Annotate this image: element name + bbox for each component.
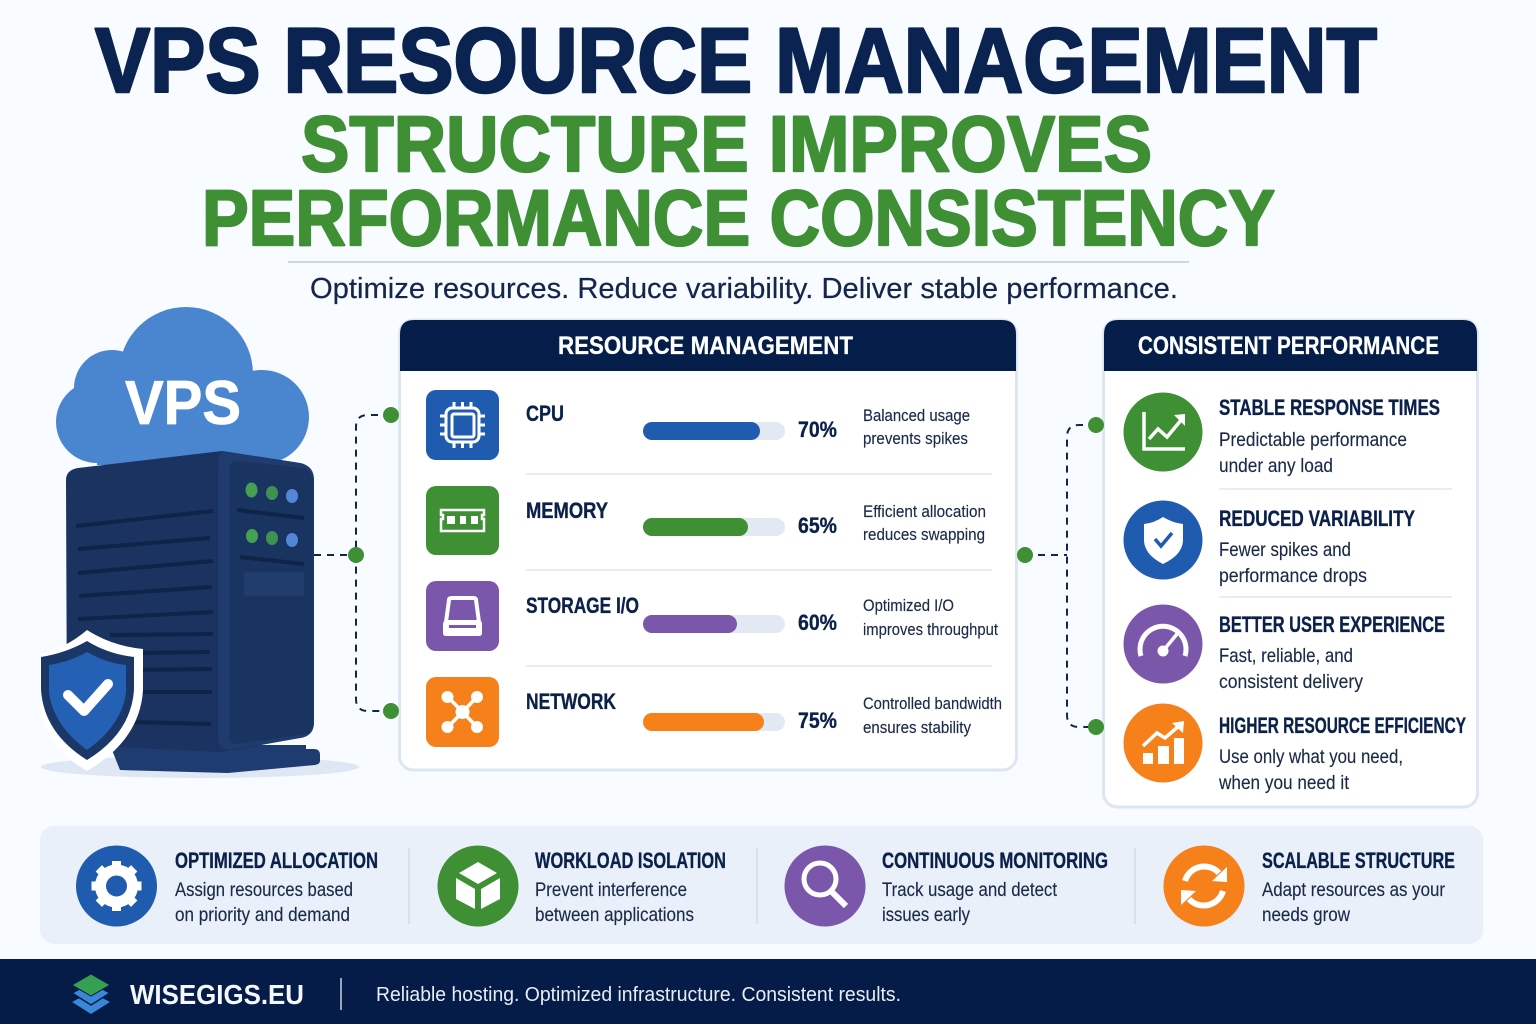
benefit: workload isolation: WORKLOAD ISOLATION [535, 848, 726, 873]
icon: layered logo [72, 974, 110, 1014]
icon: refresh arrows [1164, 846, 1244, 926]
benefit: optimized allocation: Assign resources based [175, 879, 353, 901]
benefit: workload isolation: Prevent interference [535, 879, 687, 901]
item: higher resource efficiency: Use only what you need, [1219, 746, 1403, 768]
benefit: optimized allocation: on priority and demand [175, 904, 350, 926]
icon: gauge [1124, 604, 1202, 684]
title: STRUCTURE IMPROVES [301, 99, 1152, 188]
panel header [1104, 320, 1477, 371]
benefit: continuous monitoring: issues early [882, 904, 970, 926]
row: memory: reduces swapping [863, 525, 985, 544]
row: memory: MEMORY [526, 498, 608, 523]
subtitle: Optimize resources. Reduce variability. Deliver stable performance. [310, 273, 1178, 305]
footer bar [0, 959, 1536, 1024]
icon: line chart [1124, 392, 1202, 472]
row: network [426, 677, 1002, 747]
benefit: scalable structure [1164, 846, 1455, 926]
connector: server to resource panel [314, 407, 399, 719]
icon: cpu chip [426, 390, 499, 460]
item: reduced variability: Fewer spikes and [1219, 539, 1351, 561]
icon: cloud [56, 307, 309, 465]
row: network: Controlled bandwidth [863, 694, 1002, 713]
ground shadow [41, 756, 359, 778]
benefit: workload isolation: between applications [535, 904, 694, 926]
item: stable response times: under any load [1219, 455, 1333, 477]
item: reduced variability [1124, 500, 1415, 587]
item: better user experience: consistent delivery [1219, 671, 1363, 693]
row: storage: 60% [798, 610, 837, 635]
tagline: Reliable hosting. Optimized infrastructure. Consistent results. [376, 984, 901, 1006]
benefit: continuous monitoring: CONTINUOUS MONITORING [882, 848, 1108, 873]
panel: bottom benefits band [40, 826, 1483, 944]
row: CPU: 70% [798, 417, 837, 442]
icon: server tower [66, 451, 320, 773]
icon: gear [76, 846, 157, 926]
brand name: WISEGIGS.EU [130, 979, 304, 1010]
row: network: 75% [798, 708, 837, 733]
connector: resource panel to performance panel [1017, 417, 1104, 735]
row: CPU [426, 390, 970, 460]
icon: magnifier [784, 846, 866, 926]
item: better user experience: Fast, reliable, and [1219, 645, 1353, 667]
benefit: optimized allocation [76, 846, 378, 926]
item: reduced variability: performance drops [1219, 565, 1367, 587]
benefit: continuous monitoring: Track usage and detect [882, 879, 1057, 901]
benefit: workload isolation [438, 846, 726, 926]
panel header: CONSISTENT PERFORMANCE [1138, 332, 1439, 360]
row: storage: Optimized I/O [863, 596, 954, 615]
title: PERFORMANCE CONSISTENCY [202, 173, 1275, 262]
bar: memory 65% [643, 518, 785, 536]
icon: cube [438, 846, 518, 926]
row: CPU: Balanced usage [863, 406, 970, 425]
row: memory [426, 486, 986, 555]
row: network: ensures stability [863, 718, 971, 737]
illustration: VPS cloud and server [40, 307, 359, 778]
panel header [400, 320, 1016, 371]
bar: storage 60% [643, 615, 785, 633]
item: stable response times: Predictable performance [1219, 429, 1407, 451]
panel header: RESOURCE MANAGEMENT [558, 332, 853, 360]
row: storage [426, 581, 998, 651]
item: better user experience [1124, 604, 1445, 693]
icon: memory module [426, 486, 499, 555]
row: CPU: prevents spikes [863, 429, 968, 448]
item: higher resource efficiency: when you need it [1218, 772, 1350, 794]
icon: growth bars [1124, 704, 1202, 782]
panel: resource management [400, 320, 1016, 770]
row: memory: Efficient allocation [863, 502, 986, 521]
icon: cloud: VPS [125, 369, 241, 438]
item: stable response times [1124, 392, 1440, 477]
item: higher resource efficiency [1124, 704, 1466, 794]
row: storage: STORAGE I/O [526, 593, 639, 618]
title [95, 10, 1377, 262]
icon: network nodes [426, 677, 499, 747]
row: network: NETWORK [526, 689, 616, 714]
panel: consistent performance [1104, 320, 1478, 807]
icon: shield [1124, 500, 1202, 580]
row: CPU: CPU [526, 401, 564, 426]
benefit: continuous monitoring [784, 846, 1108, 926]
item: better user experience: BETTER USER EXPERIENCE [1219, 612, 1445, 637]
benefit: scalable structure: needs grow [1262, 904, 1351, 926]
icon: storage drive [426, 581, 499, 651]
benefit: scalable structure: SCALABLE STRUCTURE [1262, 848, 1455, 873]
icon: shield with check [40, 630, 143, 771]
bar: network 75% [643, 713, 785, 731]
bar: CPU 70% [643, 422, 785, 440]
row: memory: 65% [798, 513, 837, 538]
benefit: optimized allocation: OPTIMIZED ALLOCATION [175, 848, 378, 873]
item: stable response times: STABLE RESPONSE TIMES [1219, 395, 1440, 420]
row: storage: improves throughput [863, 620, 998, 639]
title: VPS RESOURCE MANAGEMENT [95, 10, 1377, 112]
item: reduced variability: REDUCED VARIABILITY [1219, 506, 1415, 531]
benefit: scalable structure: Adapt resources as your [1262, 879, 1445, 901]
